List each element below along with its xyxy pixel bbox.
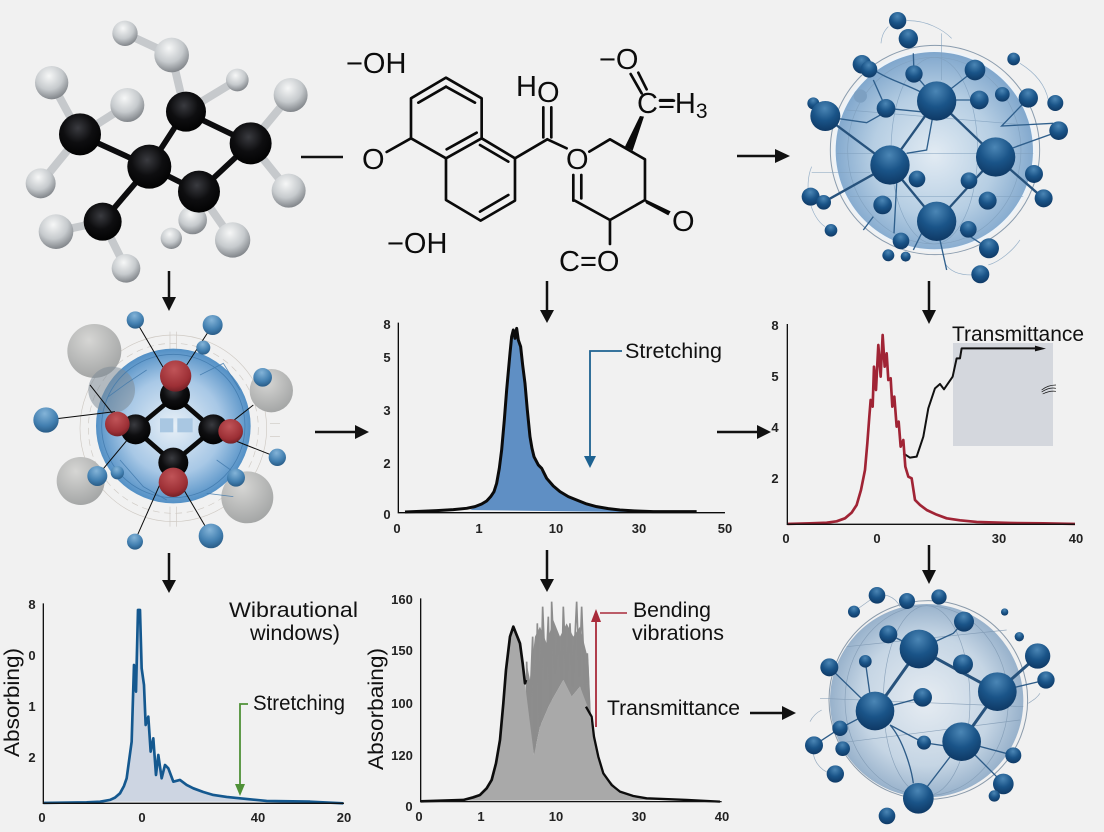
- y axis labels: 0: [28, 648, 36, 663]
- y axis labels: 0: [405, 799, 413, 814]
- grey inset panel: [953, 343, 1053, 446]
- formula labels: O: [672, 206, 695, 238]
- formula labels: O: [362, 144, 385, 176]
- y axis labels: [383, 317, 391, 522]
- x axis labels: 50: [718, 521, 732, 536]
- y axis labels: 150: [391, 643, 413, 658]
- y axis labels: 5: [771, 369, 779, 384]
- callout: bending vibrations: Bending: [633, 599, 711, 622]
- formula labels: −O: [599, 44, 638, 76]
- formula labels: O: [566, 144, 589, 176]
- chart: blue absorbing spectrum: [1, 597, 358, 825]
- structural formula: [387, 73, 674, 244]
- arrow: down from middle chart: [540, 550, 554, 592]
- callout: stretching: [235, 692, 345, 796]
- arrow: structure to globe: [737, 149, 790, 163]
- chart: blue stretching spectrum: [383, 317, 732, 536]
- callout: stretching: [584, 340, 722, 468]
- y axis labels: 3: [383, 403, 391, 418]
- x axis labels: 10: [549, 521, 563, 536]
- arrow: middle chart to red chart: [717, 425, 771, 439]
- y axis labels: 8: [771, 318, 779, 333]
- title: vibrational windows: windows): [249, 622, 340, 645]
- x axis labels: 0: [393, 521, 401, 536]
- y axis labels: 8: [28, 597, 36, 612]
- y axis labels: 8: [383, 317, 391, 332]
- x axis labels: 20: [337, 810, 351, 825]
- y axis labels: [28, 597, 36, 765]
- title: vibrational windows: [229, 599, 358, 645]
- formula labels: C=H: [637, 88, 696, 120]
- x axis labels: [415, 809, 729, 824]
- y axis title: Absorbing): [1, 648, 24, 757]
- arrow: down from structure: [540, 281, 554, 323]
- label: transmittance: Transmittance: [952, 323, 1084, 346]
- y axis labels: 160: [391, 592, 413, 607]
- y axis labels: 2: [771, 471, 779, 486]
- x axis labels: 0: [415, 809, 423, 824]
- chart: red transmittance spectrum: [771, 318, 1084, 546]
- chart: grey bending spectrum: [365, 592, 740, 824]
- y axis labels: 0: [383, 507, 391, 522]
- y axis labels: 120: [391, 748, 413, 763]
- x axis labels: 40: [251, 810, 265, 825]
- formula labels: 3: [696, 100, 708, 123]
- callout: stretching: Stretching: [625, 340, 722, 363]
- icon: blue network globe: [802, 12, 1068, 283]
- x axis labels: [38, 810, 351, 825]
- arrow: down from globe: [922, 281, 936, 324]
- y axis labels: [771, 318, 779, 486]
- callout: stretching: Stretching: [253, 692, 345, 715]
- y axis labels: 100: [391, 696, 413, 711]
- arrow: transmittance to lower globe: [750, 706, 796, 720]
- x axis labels: 0: [38, 810, 46, 825]
- arrow: down from molecule: [162, 271, 176, 311]
- y axis labels: 2: [28, 750, 36, 765]
- y axis labels: 1: [28, 699, 36, 714]
- formula labels: −OH: [346, 48, 406, 80]
- x axis labels: 10: [549, 809, 563, 824]
- arrow: molecule to structure: [301, 156, 343, 158]
- formula labels: H: [516, 71, 537, 103]
- x axis labels: 40: [715, 809, 729, 824]
- icon: lower blue network globe: [805, 587, 1055, 824]
- arrow: down from sphere: [162, 553, 176, 593]
- callout: bending vibrations: [591, 599, 724, 727]
- y axis labels: 4: [771, 420, 779, 435]
- arrow: down from red chart: [922, 545, 936, 584]
- icon: red and black molecule in blue sphere: [33, 311, 293, 550]
- x axis labels: [393, 521, 732, 536]
- formula labels: −OH: [387, 228, 447, 260]
- title: vibrational windows: Wibrautional: [229, 599, 358, 622]
- x axis labels: 0: [138, 810, 146, 825]
- formula labels: O: [537, 77, 560, 109]
- callout: bending vibrations: vibrations: [632, 622, 724, 645]
- x axis labels: 1: [477, 809, 485, 824]
- x axis labels: 0: [873, 531, 881, 546]
- x axis labels: [782, 531, 1083, 546]
- y axis labels: [391, 592, 413, 814]
- y axis title: Absorbaing): [365, 648, 388, 770]
- x axis labels: 0: [782, 531, 790, 546]
- x axis labels: 30: [992, 531, 1006, 546]
- chart fill area: [470, 331, 637, 512]
- x axis labels: 1: [475, 521, 483, 536]
- y axis labels: 5: [383, 350, 391, 365]
- arrow: sphere to middle chart: [315, 425, 369, 439]
- formula labels: C=O: [559, 246, 619, 278]
- formula labels: [346, 44, 708, 278]
- x axis labels: 40: [1069, 531, 1083, 546]
- label: transmittance: Transmittance: [607, 697, 740, 720]
- x axis labels: 30: [632, 809, 646, 824]
- y axis labels: 2: [383, 456, 391, 471]
- x axis labels: 30: [632, 521, 646, 536]
- icon: ball and stick molecule: [26, 21, 308, 283]
